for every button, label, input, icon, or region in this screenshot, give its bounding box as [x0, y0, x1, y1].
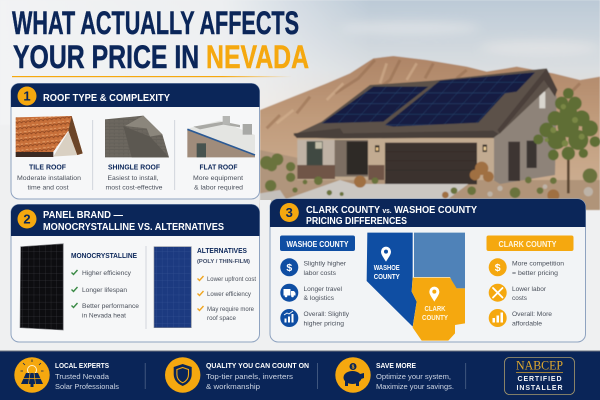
alternatives list: ALTERNATIVES: [197, 246, 247, 255]
footer: save more: [335, 357, 454, 393]
alternatives list: roof space: [207, 315, 236, 322]
footer: quality: & workmanship: [206, 382, 260, 391]
clark county text: costs: [512, 295, 528, 302]
monocrystalline list: in Nevada heat: [82, 312, 126, 320]
image: shingle roof: [105, 116, 169, 157]
panel 2 heading: PANEL BRAND —: [43, 209, 123, 221]
footer: local experts: Trusted Nevada: [55, 372, 109, 381]
window and door: [307, 141, 323, 165]
washoe county text: Overall: Slightly: [304, 311, 350, 318]
washoe county icons: [280, 258, 298, 327]
footer: quality: Top-tier panels, inverters: [206, 372, 293, 381]
clark county text: = better pricing: [512, 270, 558, 277]
washoe county pill: WASHOE COUNTY: [286, 240, 349, 249]
panel: roof type and complexity: [11, 84, 260, 199]
washoe county pill: [280, 236, 355, 251]
image: flat roof: [187, 116, 255, 157]
nevada map: [367, 233, 465, 341]
title: WHAT ACTUALLY AFFECTS: [12, 5, 299, 41]
footer: quality: [165, 357, 309, 393]
shingle roof label: [106, 162, 163, 192]
shrubs: [260, 153, 597, 198]
icon: sun and solar panel: [14, 357, 50, 393]
gable wall: [493, 77, 557, 184]
footer: local experts: LOCAL EXPERTS: [55, 361, 109, 370]
monocrystalline list: [71, 251, 139, 320]
gap below photo: [260, 200, 271, 212]
number badge 3: 3: [286, 205, 293, 220]
washoe county text: Longer travel: [304, 286, 343, 293]
number badge 1: 1: [23, 89, 31, 104]
panel: county pricing differences: [270, 199, 586, 342]
footer band: [0, 350, 600, 400]
shingle roof label: Easiest to install,: [108, 175, 159, 182]
NABCEP certified installer badge: NABCEP: [516, 358, 563, 372]
monocrystalline panel image: [20, 244, 63, 330]
panel: panel brand: [11, 204, 260, 342]
washoe county icons: $: [286, 262, 292, 274]
NABCEP certified installer badge: [504, 358, 574, 394]
front wall: [297, 138, 494, 180]
garage door: [385, 143, 477, 184]
tile roof label: [17, 162, 81, 192]
nevada map: CLARK: [424, 306, 446, 313]
flat roof label: [193, 162, 243, 192]
nevada map: COUNTY: [422, 315, 448, 322]
panel 3 header bar: [270, 199, 586, 227]
icon: piggy bank: $: [352, 364, 355, 370]
clark county text: [512, 261, 564, 328]
NABCEP certified installer badge: INSTALLER: [516, 385, 562, 392]
alternatives list: [197, 246, 256, 322]
pin: clark: [429, 287, 439, 302]
roof: [293, 68, 557, 139]
clark county text: affordable: [512, 320, 542, 328]
panel 3 heading: [306, 204, 477, 227]
tree: [567, 153, 570, 193]
flat roof label: & labor required: [194, 184, 243, 192]
driveway: [283, 180, 468, 200]
clark county text: More competition: [512, 261, 564, 268]
washoe county text: higher pricing: [304, 320, 344, 328]
nevada map: COUNTY: [374, 274, 400, 281]
solar arrays: [322, 87, 428, 123]
orange check icons: [198, 276, 204, 310]
panel 3 heading: CLARK COUNTY vs. WASHOE COUNTY: [306, 204, 477, 216]
panel 1 header bar: [11, 84, 260, 107]
monocrystalline list: MONOCRYSTALLINE: [71, 251, 137, 260]
hero photo: house with solar panels and mountains: [0, 0, 600, 210]
panel 2 heading: MONOCRYSTALLINE VS. ALTERNATIVES: [43, 221, 224, 233]
footer: local experts: [14, 357, 119, 393]
washoe county text: & logistics: [304, 295, 335, 302]
number badge 2: [18, 210, 36, 228]
clark county icons: [489, 258, 507, 327]
clark county text: Overall: More: [512, 311, 552, 318]
alternatives list: Lower efficiency: [207, 291, 252, 298]
alternatives list: May require more: [207, 306, 254, 313]
panel 2 heading: [43, 209, 224, 233]
tile roof label: TILE ROOF: [29, 162, 66, 172]
monocrystalline list: Better performance: [82, 303, 139, 310]
footer: save more: Maximize your savings.: [376, 382, 454, 391]
number badge 2: 2: [23, 212, 31, 227]
footer: quality: QUALITY YOU CAN COUNT ON: [206, 361, 309, 370]
alternatives list: (POLY / THIN-FILM): [197, 259, 250, 265]
title: [12, 5, 309, 77]
shingle roof label: most cost-effective: [106, 184, 163, 192]
footer: save more: SAVE MORE: [376, 361, 416, 370]
footer: save more: Optimize your system,: [376, 372, 451, 381]
panel 2 header bar: [11, 204, 260, 236]
flat roof label: More equipment: [193, 175, 243, 182]
clark county pill: [486, 236, 574, 251]
icon: shield: [165, 357, 200, 393]
image: tile roof: [16, 116, 83, 157]
monocrystalline list: Longer lifespan: [82, 287, 127, 294]
clark county icons: $: [495, 262, 501, 274]
monocrystalline list: Higher efficiency: [82, 270, 132, 277]
panel 3 heading: PRICING DIFFERENCES: [306, 215, 407, 227]
clark county pill: CLARK COUNTY: [498, 240, 557, 249]
number badge 1: [18, 86, 36, 106]
clark county text: Lower labor: [512, 286, 547, 293]
washoe county text: Slightly higher: [304, 261, 347, 268]
washoe county text: [304, 261, 350, 328]
flat roof label: FLAT ROOF: [200, 162, 238, 172]
NABCEP certified installer badge: CERTIFIED: [518, 376, 562, 383]
alternatives panel image: [154, 247, 191, 328]
footer: local experts: Solar Professionals: [55, 382, 119, 391]
nevada map: WASHOE: [374, 265, 400, 272]
panel 1 heading: ROOF TYPE & COMPLEXITY: [43, 92, 170, 104]
check icons: [72, 270, 78, 308]
number badge 3: [280, 203, 299, 222]
tile roof label: Moderate installation: [17, 175, 81, 182]
title: YOUR PRICE IN NEVADA: [13, 39, 309, 75]
shingle roof label: SHINGLE ROOF: [108, 162, 160, 172]
pin: washoe: [381, 247, 391, 262]
side windows: [508, 142, 520, 181]
washoe county text: labor costs: [304, 270, 337, 277]
alternatives list: Lower upfront cost: [207, 276, 256, 283]
tile roof label: time and cost: [28, 184, 69, 192]
